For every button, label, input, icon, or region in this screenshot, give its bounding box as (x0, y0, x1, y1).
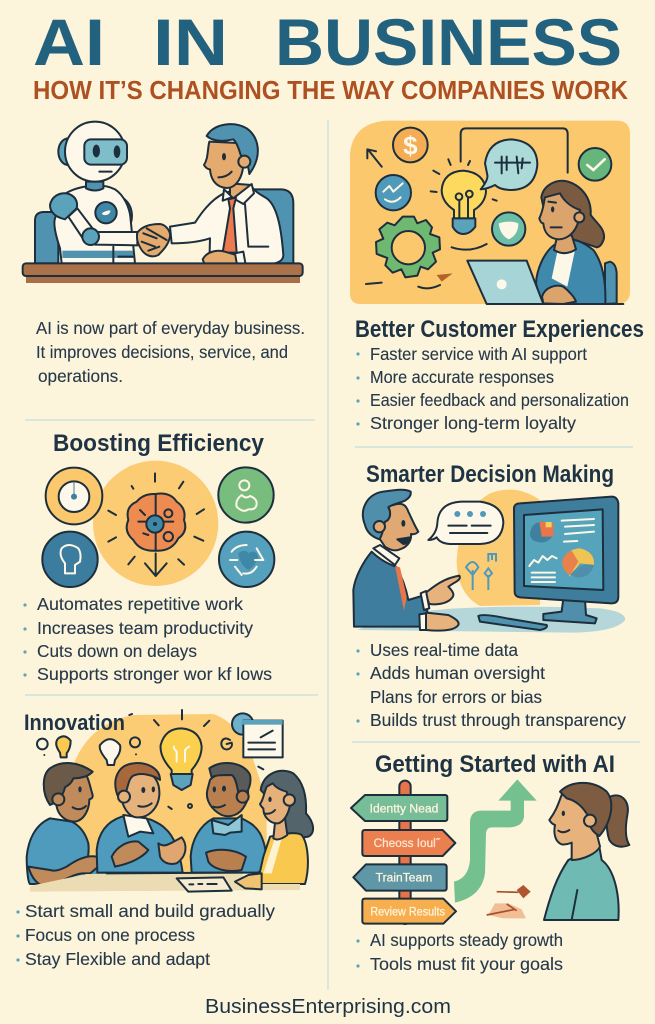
illustration: efficiency brain and icons (42, 461, 274, 587)
list: innovation bullets: Focus on one process (25, 925, 195, 945)
list: decision making bullets: Plans for errors or bias (370, 687, 542, 707)
list: efficiency bullets: Supports stronger wor kf lows (37, 664, 272, 684)
heading: boosting efficiency: Boosting Efficiency (53, 430, 265, 457)
list: customer experience bullets: More accurate responses (370, 367, 554, 387)
hand on desk (203, 251, 242, 268)
sign: identify need (351, 795, 447, 821)
sign: choose tool: Cheoss Ioul˝ (374, 836, 441, 850)
illustration: customer experience panel: $ (403, 130, 418, 160)
title: IN (153, 5, 228, 79)
intro text: AI is now part of everyday business. (36, 318, 305, 338)
desk (26, 272, 300, 283)
list: innovation bullets: Start small and build gradually (25, 901, 275, 921)
sign: identify need: Identty Nead (370, 801, 438, 815)
illustration: customer experience panel (350, 121, 630, 304)
list: getting started bullets: AI supports steady growth (370, 930, 563, 950)
table and tablet (30, 873, 300, 892)
heading: smarter decision making: Smarter Decision Making (366, 461, 614, 488)
heading: getting started with AI: Getting Started with AI (375, 751, 615, 778)
intro text: It improves decisions, service, and (36, 342, 288, 362)
illustration: man presenting at monitor (353, 490, 625, 633)
businessman (170, 185, 283, 265)
intro text (36, 318, 305, 386)
sign: review results: Review Results (370, 904, 445, 918)
illustration: innovation team (27, 710, 313, 892)
monitor (543, 598, 597, 623)
heading: innovation: Innovation (24, 710, 125, 735)
person two (97, 817, 183, 873)
sign: train team (353, 864, 447, 891)
list: customer experience bullets: Faster service with AI support (370, 344, 587, 364)
list: customer experience bullets: Easier feedback and personalization (370, 390, 629, 410)
sign: review results (362, 899, 456, 924)
list: innovation bullets: Stay Flexible and adapt (25, 949, 210, 969)
list: innovation bullets (16, 901, 275, 969)
title: BUSINESS (275, 5, 622, 79)
man (353, 552, 427, 627)
sign: choose tool (362, 830, 455, 856)
sign: train team: TrainTeam (376, 871, 432, 885)
woman (544, 847, 619, 920)
list: decision making bullets: Uses real-time data (370, 640, 518, 660)
list: efficiency bullets: Automates repetitive work (37, 594, 243, 614)
list: efficiency bullets: Cuts down on delays (37, 641, 197, 661)
list: efficiency bullets (23, 594, 272, 684)
list: customer experience bullets: Stronger long-term loyalty (370, 413, 576, 433)
woman (605, 262, 617, 304)
list: decision making bullets: Builds trust through transparency (370, 710, 626, 730)
illustration: robot and businessman handshake (23, 122, 303, 283)
intro text: operations. (38, 366, 123, 386)
list: decision making bullets: Adds human oversight (370, 663, 545, 683)
illustration: signposts, arrow and woman (351, 779, 629, 924)
person one (27, 818, 89, 884)
list: getting started bullets: Tools must fit your goals (370, 954, 563, 974)
title: AI (33, 5, 105, 79)
list: customer experience bullets (356, 344, 629, 433)
handshake (137, 224, 170, 256)
footer: BusinessEnterprising.com (205, 996, 451, 1018)
person four (261, 771, 313, 840)
robot (123, 198, 132, 224)
arrow: upward path (454, 779, 537, 903)
list: efficiency bullets: Increases team productivity (37, 618, 253, 638)
person three (191, 818, 266, 873)
list: decision making bullets (356, 640, 626, 730)
subtitle: HOW IT’S CHANGING THE WAY COMPANIES WORK (33, 77, 629, 105)
list: getting started bullets (356, 930, 563, 974)
